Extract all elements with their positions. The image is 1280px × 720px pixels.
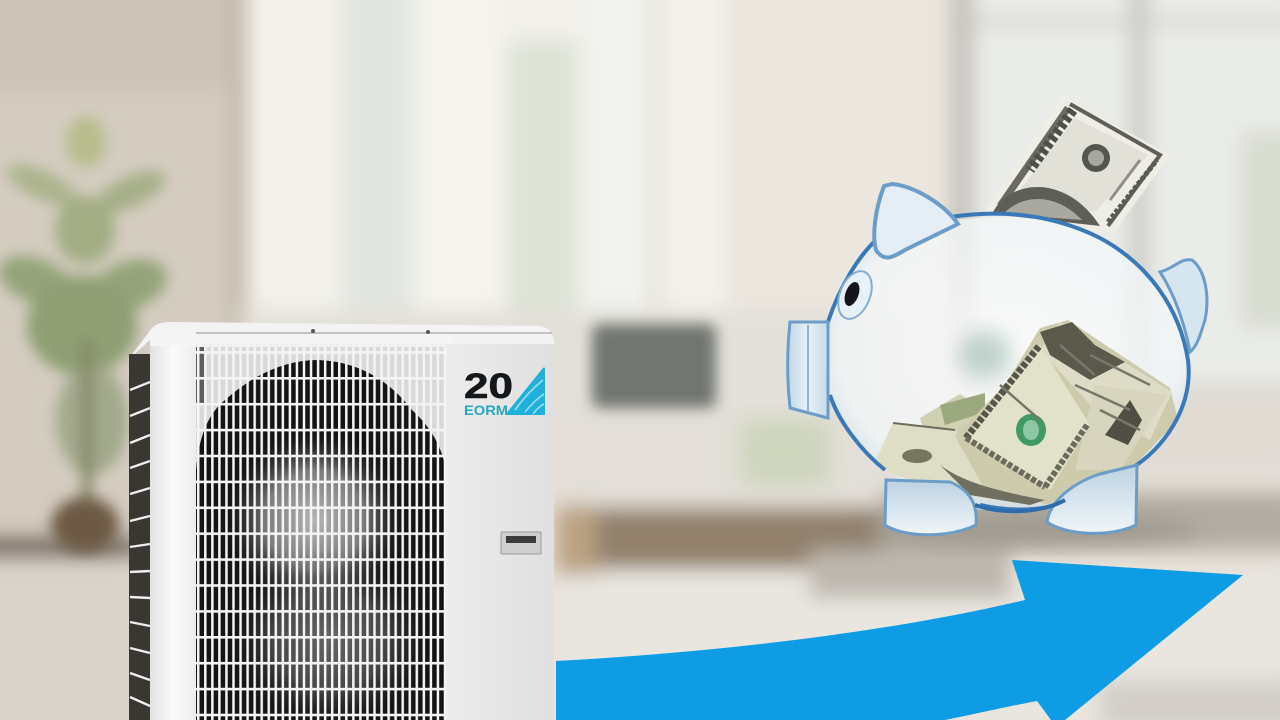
unit side fins — [129, 354, 150, 720]
arrow — [556, 560, 1243, 720]
window reflection in glass — [959, 331, 1011, 379]
eye — [832, 266, 878, 324]
unit top panel — [128, 322, 554, 360]
logo: 20 — [464, 367, 513, 406]
floor shadow — [860, 514, 1200, 546]
bill in slot — [983, 96, 1170, 234]
money inside — [872, 320, 1178, 505]
logo — [464, 367, 545, 418]
pig body outline — [828, 214, 1189, 510]
back ear — [1160, 260, 1207, 352]
heat pump unit — [128, 322, 554, 720]
pig glass body — [828, 217, 1189, 512]
rear foot — [1047, 465, 1137, 533]
dark cushion — [592, 324, 716, 408]
service handle — [501, 532, 541, 554]
fan grille — [196, 344, 446, 720]
unit corner post — [150, 334, 196, 720]
front ear — [874, 184, 958, 258]
unit right service panel — [446, 344, 554, 720]
snout — [788, 322, 828, 418]
piggy bank — [788, 96, 1207, 546]
background plant — [0, 116, 174, 553]
logo: EORM — [464, 402, 508, 418]
front foot — [885, 480, 976, 535]
